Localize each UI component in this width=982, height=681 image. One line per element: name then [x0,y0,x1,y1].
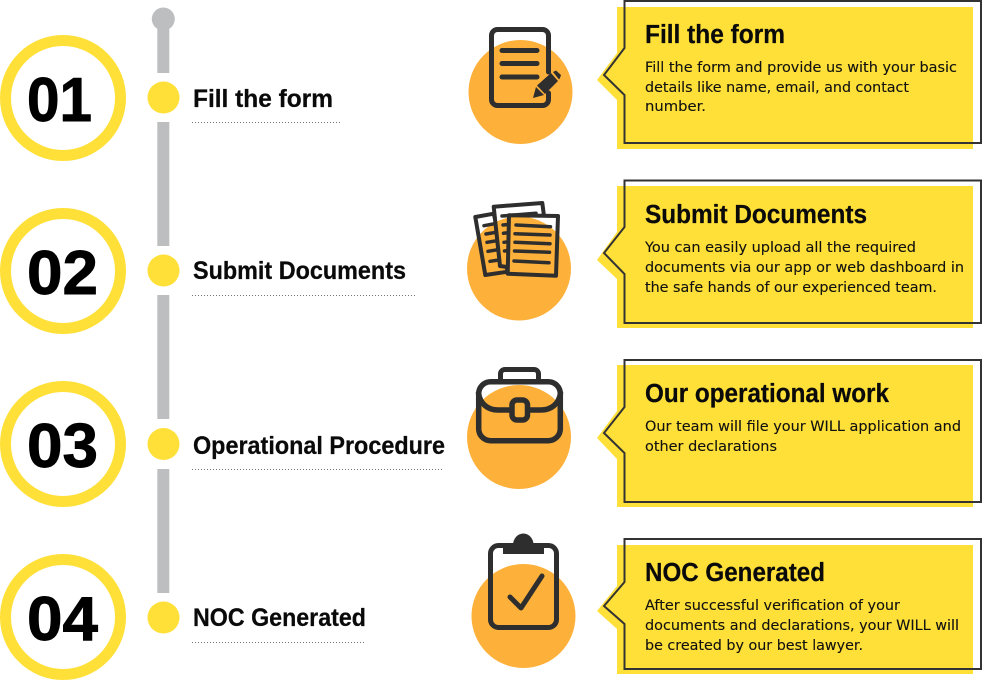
panel: fill the form: details like name, email, and contact [645,80,909,96]
step 03 timeline label [148,428,445,470]
step 01 number badge [6,40,120,156]
panel: noc generated: documents and declarations, your WILL will [645,618,959,634]
step 02 number badge [6,214,120,328]
icon: clipboard with check mark [472,534,576,668]
panel: our operational work: Our team will file your WILL application and [645,419,961,435]
panel: fill the form: Fill the form [645,21,785,49]
icon: briefcase [467,370,571,489]
step 02 number badge: 02 [27,239,98,308]
step 03 number badge: 03 [27,412,98,481]
icon: form with pencil [468,30,572,144]
panel: submit documents [597,180,981,328]
panel: submit documents: You can easily upload all the required [644,240,916,256]
vertical timeline [152,8,175,593]
step 02 timeline label [148,254,415,296]
step 01 timeline label [148,82,340,122]
panel: noc generated [597,539,981,674]
step 03 timeline label: Operational Procedure [193,432,445,460]
panel: noc generated: be created by our best lawyer. [645,638,863,654]
panel: our operational work: other declarations [645,439,777,455]
step 04 number badge: 04 [27,585,99,654]
panel: submit documents: documents via our app or web dashboard in [645,260,964,276]
step 01 timeline label: Fill the form [193,85,333,113]
step 04 timeline label: NOC Generated [193,604,366,632]
panel: our operational work [597,360,981,507]
panel: noc generated: After successful verification of your [645,598,900,614]
panel: noc generated: NOC Generated [645,559,825,587]
step 04 number badge [6,560,120,674]
panel: fill the form [597,1,981,149]
icon: stack of documents [467,203,571,320]
step 02 timeline label: Submit Documents [193,257,406,285]
step 01 number badge: 01 [27,66,92,135]
panel: fill the form: number. [645,99,706,115]
step 03 number badge [6,386,120,502]
panel: fill the form: Fill the form and provide us with your basic [645,60,957,76]
panel: our operational work: Our operational work [645,380,890,408]
panel: submit documents: the safe hands of our experienced team. [645,280,937,296]
step 04 timeline label [148,602,366,642]
panel: submit documents: Submit Documents [645,201,867,229]
